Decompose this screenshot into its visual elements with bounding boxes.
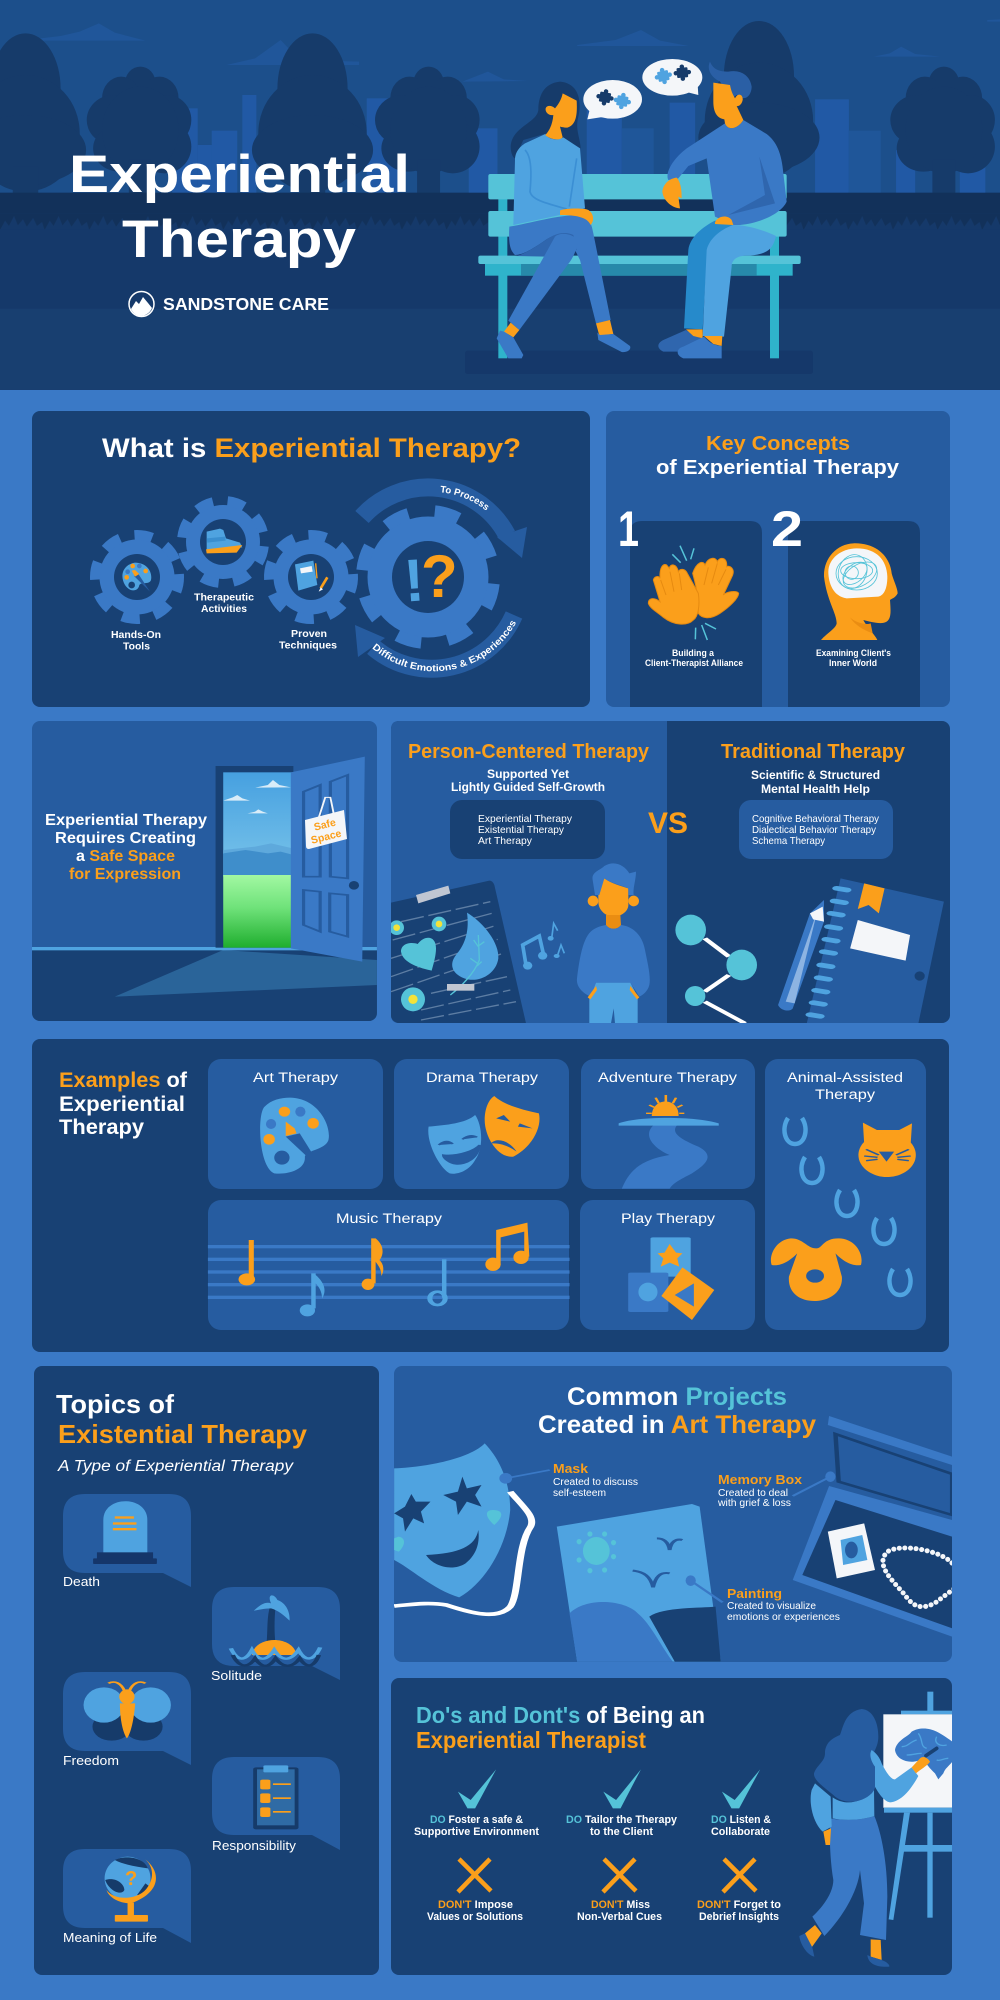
don't list: DON'T Miss	[591, 1899, 650, 1911]
person	[577, 863, 650, 1023]
do list: Collaborate	[711, 1826, 770, 1838]
speech bubble: man	[642, 59, 702, 96]
heading	[656, 433, 900, 479]
title	[69, 145, 410, 269]
panel: person-centered vs traditional therapy	[389, 721, 950, 1023]
heading: A Type of Experiential Therapy	[57, 1458, 294, 1475]
do list: DO Tailor the Therapy	[566, 1814, 678, 1826]
icon: hiking boot	[206, 529, 242, 553]
don't list: Values or Solutions	[427, 1911, 523, 1923]
icon: notebook and pencil	[295, 561, 327, 592]
card: adventure therapy	[581, 1059, 755, 1189]
heading	[59, 1069, 188, 1139]
icon: gravestone	[93, 1501, 157, 1564]
heading: Common Projects	[567, 1383, 787, 1411]
callout: mask: Mask	[553, 1461, 589, 1476]
card: animal-assisted therapy: Therapy	[815, 1087, 875, 1102]
heading: Existential Therapy	[58, 1419, 308, 1449]
park background scene	[0, 0, 1000, 390]
card: drama therapy	[394, 1059, 569, 1189]
list box: traditional: Cognitive Behavioral Therapy	[752, 813, 880, 825]
icons: horseshoes	[784, 1118, 911, 1295]
do list: Supportive Environment	[414, 1826, 539, 1838]
bench	[478, 174, 801, 358]
list box: person-centered: Existential Therapy	[478, 824, 565, 836]
molecule	[675, 915, 757, 1023]
icon: globe with question mark: ?	[125, 1868, 137, 1890]
heading: Key Concepts	[706, 433, 850, 455]
heading: Experiential Therapist	[416, 1727, 646, 1753]
label: Examining Client's	[816, 648, 891, 658]
text block: Experiential Therapy	[45, 812, 207, 829]
heading: Created in Art Therapy	[538, 1411, 816, 1439]
curved arrow: to process	[356, 478, 527, 558]
title: Experiential	[69, 145, 410, 204]
callout: memory box: Memory Box	[718, 1472, 803, 1487]
heading: Therapy	[59, 1116, 144, 1139]
illustrations	[394, 1416, 955, 1662]
heading: Experiential	[59, 1093, 185, 1116]
gear icons	[122, 529, 327, 592]
icon: toy blocks	[628, 1237, 714, 1320]
gear labels: Tools	[123, 640, 150, 652]
icon: head with scribble	[821, 543, 898, 640]
heading: Do's and Dont's of Being an	[416, 1702, 705, 1728]
callout: painting: Created to visualize	[727, 1601, 817, 1612]
topic: death	[63, 1494, 191, 1589]
label: Client-Therapist Alliance	[645, 658, 743, 668]
curved arrow: to process: To Process	[440, 486, 488, 510]
painting	[557, 1504, 723, 1662]
label: Building a	[672, 648, 714, 658]
list box: person-centered: Art Therapy	[478, 835, 533, 847]
list box: traditional: Schema Therapy	[752, 835, 826, 847]
gear labels: Therapeutic	[194, 592, 254, 604]
room and door illustration	[32, 757, 377, 1025]
icon: dog	[771, 1238, 862, 1301]
man	[658, 62, 787, 358]
icon: exclamation and question: ?	[421, 543, 458, 610]
heading: Examples of	[59, 1069, 188, 1092]
don't list: DON'T Impose	[438, 1899, 513, 1911]
panel: topics of existential therapy	[34, 1366, 379, 1975]
painter	[799, 1709, 930, 1967]
don't list: Non-Verbal Cues	[577, 1911, 662, 1923]
card: drama therapy: Drama Therapy	[426, 1070, 538, 1085]
door sign	[305, 810, 347, 849]
topic: responsibility	[212, 1757, 340, 1853]
icon: cat	[858, 1123, 916, 1177]
subheading: person-centered	[451, 769, 605, 794]
gear: proven techniques	[266, 532, 356, 622]
gear labels: Proven	[291, 628, 327, 640]
curved arrow: difficult emotions: Difficult Emotions & Experiences	[372, 620, 516, 672]
gear labels	[111, 592, 337, 652]
card: animal-assisted therapy	[765, 1059, 926, 1330]
title: Therapy	[122, 210, 357, 269]
callout: mask: self-esteem	[553, 1488, 606, 1499]
gear: therapeutic activities	[178, 497, 268, 587]
concept card 1	[618, 501, 762, 707]
pearl necklace	[883, 1548, 955, 1607]
check marks	[458, 1769, 760, 1808]
icon: exclamation and question	[402, 543, 458, 615]
heading: person-centered: Person-Centered Therapy	[408, 740, 650, 763]
label	[645, 648, 743, 668]
icon: palette	[260, 1098, 329, 1174]
icon: palette	[122, 563, 151, 592]
topic: responsibility: Responsibility	[212, 1839, 297, 1853]
list box: person-centered: Experiential Therapy	[478, 813, 573, 825]
subheading: person-centered: Lightly Guided Self-Growth	[451, 782, 605, 794]
card: art therapy	[208, 1059, 383, 1189]
staff and notes	[208, 1223, 570, 1316]
topic: solitude: Solitude	[211, 1669, 262, 1683]
illustration: woman painting a brain	[799, 1692, 954, 1967]
card: art therapy: Art Therapy	[253, 1070, 338, 1085]
gear labels: Techniques	[279, 640, 337, 652]
concept card 2	[771, 501, 920, 707]
heading	[538, 1383, 816, 1439]
callout: memory box	[717, 1472, 803, 1509]
callout: memory box: Created to deal	[718, 1488, 788, 1499]
topic: death: Death	[63, 1575, 100, 1589]
VS label: VS	[648, 807, 688, 840]
heading: What is Experiential Therapy?	[102, 433, 521, 463]
list box: person-centered	[450, 800, 605, 859]
card: adventure therapy: Adventure Therapy	[598, 1070, 737, 1085]
don't list: DON'T Forget to	[697, 1899, 781, 1911]
subheading: traditional: Mental Health Help	[761, 784, 870, 796]
text block: Requires Creating	[55, 830, 196, 847]
x marks	[458, 1859, 756, 1892]
text block	[45, 812, 207, 883]
subheading: traditional: Scientific & Structured	[751, 770, 880, 782]
heading	[416, 1702, 705, 1753]
card: play therapy	[580, 1200, 755, 1330]
list box: traditional	[739, 800, 893, 859]
gear: hands-on tools	[92, 532, 182, 622]
gear labels: Activities	[201, 603, 247, 615]
panel: what is experiential therapy	[32, 411, 590, 707]
do list	[414, 1814, 771, 1838]
heading: Topics of	[56, 1389, 174, 1419]
logo: Sandstone Care: SANDSTONE CARE	[163, 294, 329, 314]
icon: exclamation and question: !	[402, 546, 426, 615]
topic: freedom: Freedom	[63, 1754, 119, 1768]
logo: Sandstone Care	[129, 292, 329, 316]
do list: DO Foster a safe &	[430, 1814, 523, 1826]
memory box	[793, 1416, 952, 1637]
callout: painting: emotions or experiences	[727, 1612, 840, 1623]
blue notebook and pencil	[778, 878, 944, 1023]
heading: traditional: Traditional Therapy	[721, 740, 906, 763]
label: Inner World	[829, 658, 877, 668]
don't list	[427, 1899, 781, 1923]
bench shadow	[465, 351, 813, 374]
don't list: Debrief Insights	[699, 1911, 779, 1923]
topic: meaning of life: Meaning of Life	[63, 1931, 157, 1945]
card: music therapy: Music Therapy	[336, 1211, 442, 1226]
callout: painting	[727, 1586, 840, 1623]
callout: mask: Created to discuss	[553, 1477, 638, 1488]
music notes	[523, 923, 564, 970]
heading	[56, 1389, 308, 1475]
card: music therapy	[208, 1200, 570, 1330]
brain drawing	[895, 1729, 952, 1779]
subheading: traditional	[751, 770, 880, 796]
card: animal-assisted therapy: Animal-Assisted	[787, 1070, 903, 1085]
mask	[394, 1443, 550, 1614]
heading: of Experiential Therapy	[656, 457, 900, 479]
illustrations clipped to panel	[389, 863, 944, 1023]
door sign: Safe	[313, 817, 337, 834]
notebook with sketches	[389, 881, 526, 1023]
label	[816, 648, 891, 668]
panel: common projects in art therapy	[394, 1366, 955, 1662]
do list: DO Listen &	[711, 1814, 771, 1826]
do list: to the Client	[590, 1826, 653, 1838]
panel: key concepts	[606, 411, 950, 707]
panel: safe space	[32, 721, 377, 1025]
concept card 2: 2	[771, 501, 803, 557]
gear labels: Hands-On	[111, 629, 161, 641]
callout: memory box: with grief & loss	[717, 1498, 791, 1509]
illustration: two people on a bench	[465, 59, 813, 374]
icon: theatre masks	[428, 1096, 540, 1174]
icon: palm island	[231, 1595, 320, 1666]
card: play therapy: Play Therapy	[621, 1211, 715, 1226]
icon: butterfly	[84, 1682, 171, 1741]
concept card 1: 1	[618, 501, 639, 557]
text block: for Expression	[69, 866, 181, 883]
gear: central question	[355, 504, 501, 650]
icon: clipboard	[253, 1765, 298, 1829]
woman	[497, 82, 630, 358]
panel: examples of experiential therapy	[32, 1039, 949, 1352]
callout: painting: Painting	[727, 1586, 782, 1601]
topic: solitude	[211, 1587, 340, 1683]
speech bubble: woman	[583, 80, 642, 119]
easel	[883, 1692, 954, 1920]
callout: mask	[553, 1461, 638, 1499]
list box: traditional: Dialectical Behavior Therapy	[752, 824, 877, 836]
panel: do's and don'ts	[391, 1678, 954, 1975]
door sign: Space	[310, 828, 343, 847]
icon: high five	[648, 546, 739, 640]
text block: a Safe Space	[76, 848, 175, 865]
subheading: person-centered: Supported Yet	[487, 769, 569, 781]
icon: sunset path	[619, 1095, 719, 1189]
topic: meaning of life	[63, 1849, 191, 1945]
topic: freedom	[63, 1672, 191, 1768]
hero banner	[0, 0, 1000, 390]
